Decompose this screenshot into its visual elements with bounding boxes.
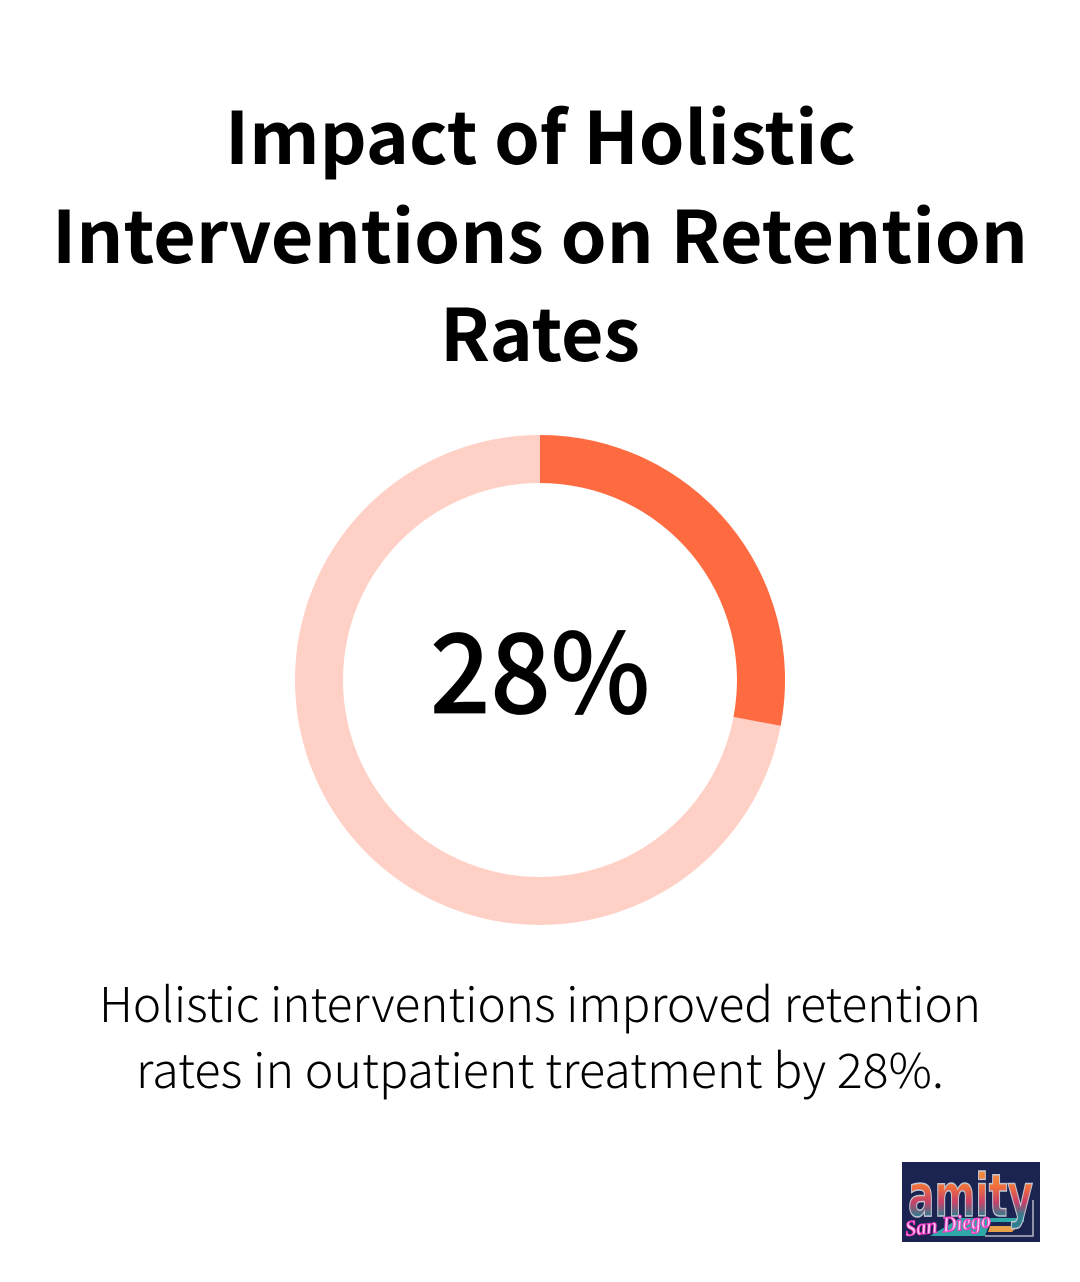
donut track [319,459,761,901]
description text: Holistic interventions improved retention [99,966,981,1036]
logo: Amity San Diego [902,1161,1040,1242]
title: Rates [440,277,640,382]
description text: rates in outpatient treatment by 28%. [136,1032,944,1102]
title [52,80,1028,382]
description text [99,966,981,1102]
donut chart: 28% [319,435,785,901]
logo wordmark: amity [908,1161,1033,1230]
title: Interventions on Retention [52,179,1028,284]
title: Impact of Holistic [225,80,856,185]
center value: 28% [430,585,650,745]
logo stripes [930,1218,1024,1236]
logo script: San Diego [904,1207,992,1241]
donut value segment [540,435,785,726]
